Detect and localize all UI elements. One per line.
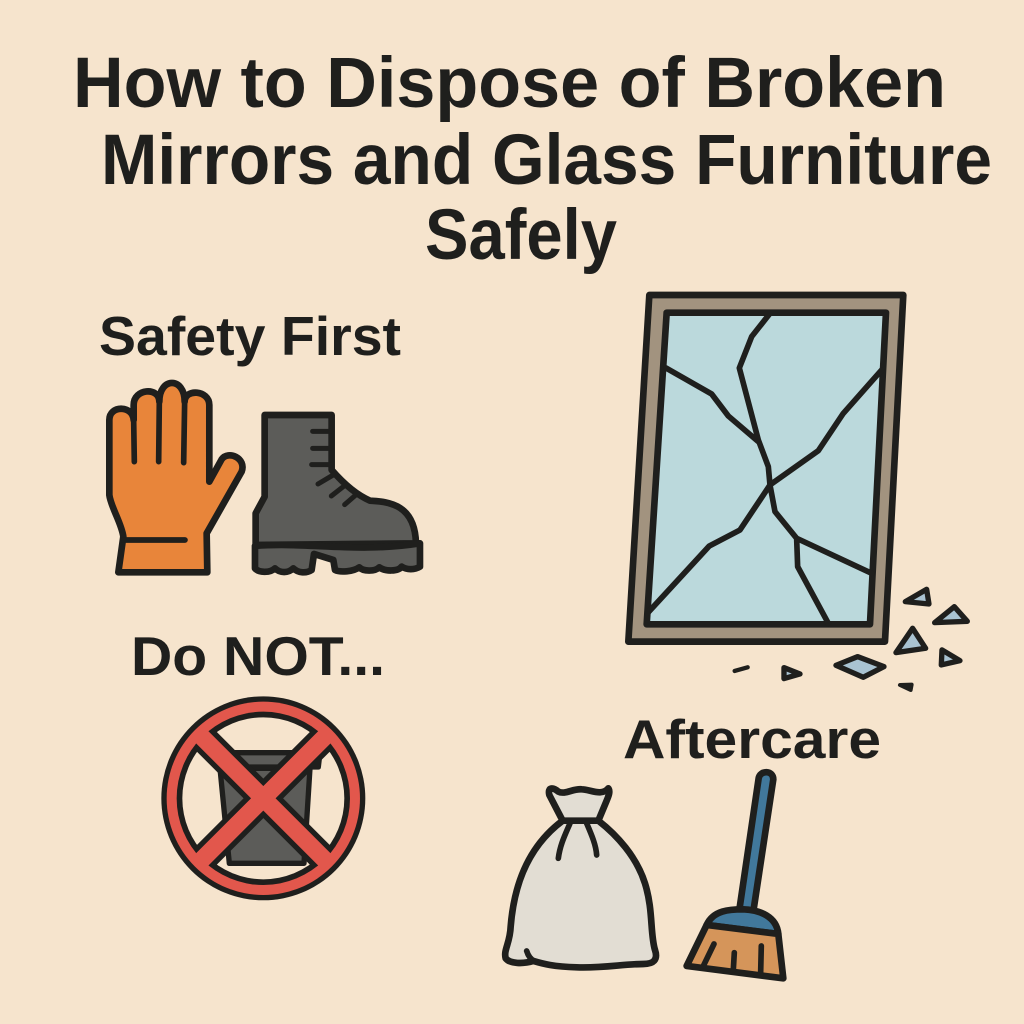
trash bin xyxy=(220,753,320,863)
glass shards xyxy=(735,589,967,690)
icon: tied trash bag xyxy=(505,788,656,967)
heading: Aftercare: Aftercare xyxy=(623,708,881,770)
icon: work boot xyxy=(255,415,420,572)
broom head xyxy=(707,909,778,934)
prohibition ring back xyxy=(161,696,365,900)
icon: push broom xyxy=(687,772,783,978)
broom bristles xyxy=(687,925,783,978)
red cross xyxy=(197,732,330,864)
title: Safely xyxy=(425,196,617,275)
illustration: broken mirror xyxy=(628,295,967,690)
broom handle xyxy=(739,772,773,912)
title xyxy=(73,44,992,275)
icon: orange glove xyxy=(109,383,243,572)
title: Mirrors and Glass Furniture xyxy=(101,121,992,200)
icon: prohibited trash bin xyxy=(161,696,365,900)
heading: Safety First: Safety First xyxy=(99,305,401,367)
title: How to Dispose of Broken xyxy=(73,44,946,123)
heading: Do NOT: Do NOT... xyxy=(131,625,385,687)
mirror glass xyxy=(647,313,886,624)
mirror frame xyxy=(628,295,903,642)
mirror cracks xyxy=(647,313,882,623)
